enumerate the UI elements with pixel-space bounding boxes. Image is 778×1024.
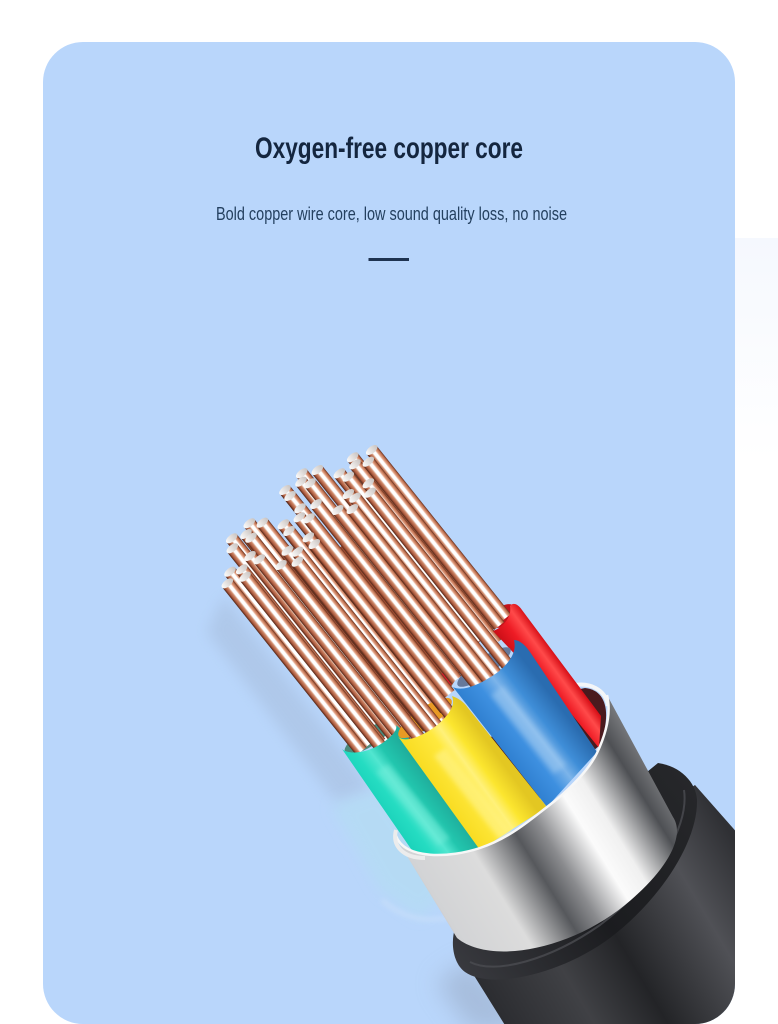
wires: rear left conductor bundle <box>224 516 450 748</box>
black outer jacket <box>455 785 740 1024</box>
faint side panel <box>670 238 778 460</box>
subtitle: Bold copper wire core, low sound quality loss, no noise <box>216 203 567 224</box>
blurred cable reflection <box>207 596 530 1024</box>
title: Oxygen-free copper core <box>255 132 523 165</box>
wires: blue conductor bundle <box>330 486 516 693</box>
silver metal shield <box>395 695 677 951</box>
wires: rear conductor bundle <box>279 465 458 685</box>
copper shadow behind the wire mass <box>340 546 480 686</box>
wires: yellow conductor bundle <box>274 530 457 745</box>
wires: red conductor bundle <box>332 443 520 648</box>
tube: blue insulation <box>453 640 597 807</box>
wires: teal conductor bundle <box>220 549 411 760</box>
tube: red insulation <box>493 604 601 748</box>
wires: middle conductor bundle <box>292 497 462 698</box>
tube: yellow insulation <box>397 696 547 850</box>
heading underline <box>368 258 409 261</box>
jacket collar <box>453 763 697 980</box>
silver shield inner back rim <box>478 682 608 847</box>
tube: teal insulation <box>342 725 480 862</box>
